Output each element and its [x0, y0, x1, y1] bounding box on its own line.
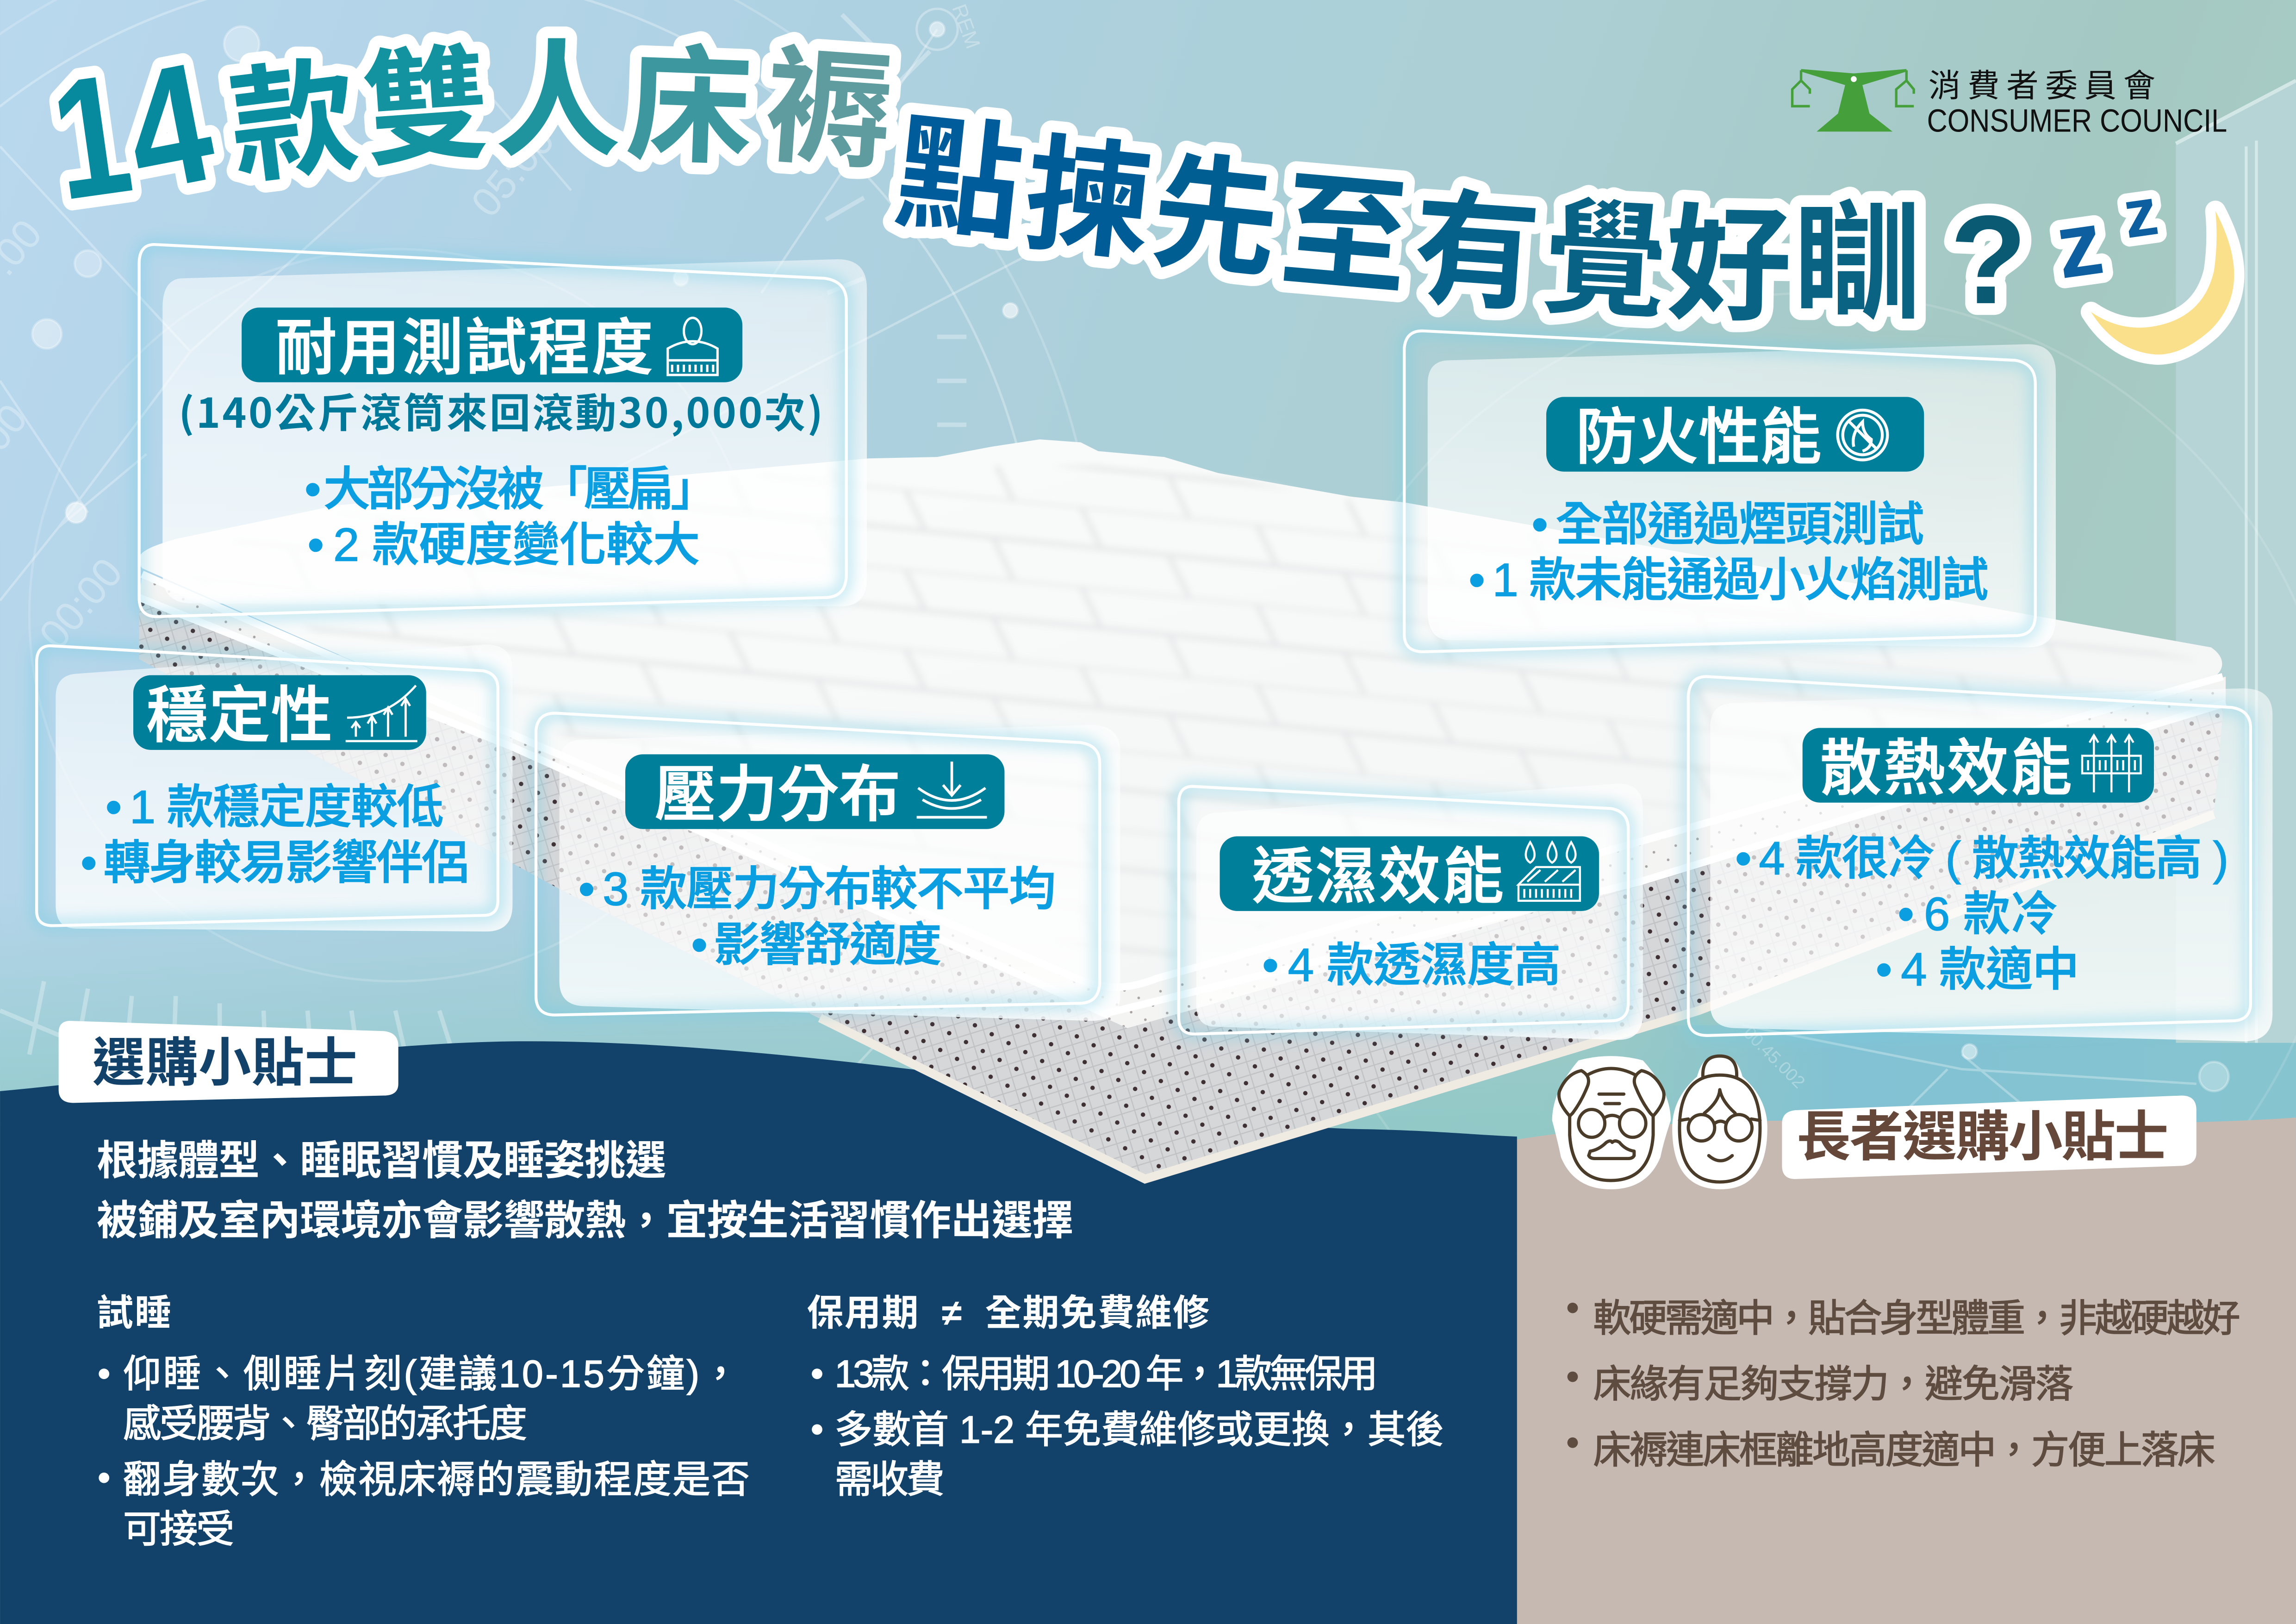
tip column: warranty: 保用期 ≠ 全期免費維修: [807, 1292, 1209, 1333]
buying tips tab: 選購小貼士: [92, 1020, 357, 1096]
mattress: quilted top surface: [139, 439, 2222, 987]
findings: • 4 款適中: [1876, 943, 2079, 996]
bullet: free repair: 需收費: [834, 1459, 945, 1501]
title line 2: 有: [1408, 178, 1544, 327]
buying tips intro: 被鋪及室內環境亦會影響散熱，宜按生活習慣作出選擇: [97, 1198, 1073, 1243]
findings: [305, 463, 717, 571]
findings: • 1 款未能通過小火焰測試: [1468, 554, 1989, 606]
bullet: try positions: [99, 1353, 740, 1445]
title line 1: 褥: [761, 36, 896, 185]
background: door frame: [2176, 81, 2296, 1043]
background: clock time labels: 00:00: [30, 550, 131, 657]
mattress: edge piping: [142, 574, 2223, 987]
panel: stability: [37, 644, 512, 931]
heading text: 散熱效能: [1820, 718, 2072, 807]
icon: sleeping z letters: z: [2118, 173, 2162, 252]
elderly tips tab: 長者選購小貼士: [1797, 1093, 2169, 1171]
bullet: turn over: [99, 1459, 750, 1550]
findings: • 1 款穩定度較低: [106, 781, 444, 833]
icon: rising arrows: [346, 686, 417, 741]
bullet: free repair: 多數首 1-2 年免費維修或更換，其後: [834, 1409, 1444, 1451]
heading pill: [1546, 397, 1924, 472]
heading pill: [242, 307, 742, 382]
findings: [579, 863, 1056, 971]
heading text: 防火性能: [1575, 387, 1822, 476]
panel outline: [139, 244, 846, 617]
logo text: [1927, 60, 2227, 139]
mattress: quilting pattern: [154, 466, 2196, 969]
tip column: trial sleep: 試睡: [97, 1292, 171, 1333]
bullet: try positions: 感受腰背、臀部的承托度: [123, 1403, 527, 1445]
title line 1: 4: [112, 26, 227, 228]
panel outline: [1404, 331, 2035, 652]
findings: • 全部通過煙頭測試: [1531, 498, 1924, 550]
panel outline: [1688, 676, 2251, 1036]
bullet: height: 床褥連床框離地高度適中，方便上落床: [1593, 1430, 2215, 1472]
bullet: free repair: [812, 1409, 1444, 1501]
bullet: turn over: 可接受: [123, 1508, 234, 1550]
title line 1: 人: [495, 31, 621, 172]
title line 1: [42, 26, 896, 236]
mattress: base piping: [820, 814, 2214, 1179]
title line 2: 先: [1145, 141, 1286, 294]
tip column: warranty: [807, 1292, 1444, 1501]
tip column: trial sleep: [97, 1292, 750, 1550]
panel outline: [37, 646, 498, 926]
heading text: 透濕效能: [1252, 827, 1504, 916]
panel outline: [1179, 787, 1628, 1034]
title line 2: 好: [1664, 194, 1793, 337]
panel glass: [1196, 784, 1643, 1040]
heading pill: [1803, 728, 2154, 803]
icon: sleeping z letters: z: [2050, 191, 2109, 298]
panel glass: [162, 259, 867, 606]
title line 2: [890, 103, 2027, 337]
heading pill: [1220, 837, 1599, 911]
background: floor: [0, 893, 2296, 1624]
consumer council logo: [1792, 60, 2227, 139]
title line 1: 款: [222, 45, 365, 200]
panel glass: [560, 725, 1120, 1021]
bullet: warranty years: 13款：保用期 10-20 年，1款無保用: [834, 1353, 1378, 1395]
background: clock time labels: REM: [947, 1, 984, 52]
logo text: 消費者委員會: [1929, 60, 2155, 106]
bullet: firmness: 軟硬需適中，貼合身型體重，非越硬越好: [1593, 1298, 2240, 1340]
elderly tips list: [1568, 1298, 2240, 1472]
title line 2: ?: [1950, 189, 2027, 330]
icon: mattress with head: [668, 318, 717, 375]
icon: elderly man: [1552, 1056, 1671, 1189]
panel: durability: [139, 244, 867, 617]
logo emblem: [1792, 70, 1914, 131]
icon: sleeping z letters: [2050, 173, 2162, 298]
findings: [1735, 832, 2228, 996]
icon: elderly woman: [1672, 1055, 1767, 1189]
title line 1: 床: [624, 35, 755, 180]
heading text: 穩定性: [146, 666, 332, 755]
findings: • 4 款透濕度高: [1262, 939, 1561, 992]
title line 2: 瞓: [1794, 194, 1920, 334]
bullet: turn over: 翻身數次，檢視床褥的震動程度是否: [123, 1459, 750, 1501]
panel: moisture: [1179, 784, 1643, 1040]
buying tips intro: [97, 1137, 1073, 1243]
findings: [1468, 498, 1989, 606]
findings: • 4 款很冷 ( 散熱效能高 ): [1735, 832, 2228, 885]
panel glass: [1428, 344, 2056, 647]
findings: • 影響舒適度: [691, 918, 941, 971]
icon: heat rising: [2082, 735, 2141, 793]
mattress: upper perforated band: [139, 574, 2226, 1028]
mattress: lower perforated side: [139, 586, 2226, 1181]
findings: • 2 款硬度變化較大: [307, 519, 700, 571]
icon: no flame: [1838, 410, 1887, 460]
icon: crescent moon: [2091, 211, 2234, 355]
buying tips intro: 根據體型、睡眠習慣及睡姿挑選: [97, 1137, 666, 1183]
title line 2: 覺: [1539, 187, 1672, 335]
brown tips background: [1517, 1118, 2296, 1624]
bullet: try positions: 仰睡、側睡片刻(建議10-15分鐘)，: [123, 1353, 740, 1395]
panel: fire: [1404, 331, 2056, 652]
logo text: CONSUMER COUNCIL: [1927, 103, 2227, 139]
panel glass: [56, 644, 512, 931]
background: clock time labels: 00.45.002: [1740, 1023, 1809, 1092]
heading text: 壓力分布: [654, 745, 901, 834]
panel glass: [1710, 688, 2272, 1041]
mattress photo: [139, 439, 2226, 1181]
findings: • 轉身較易影響伴侶: [81, 837, 469, 889]
heading pill: [625, 754, 1004, 829]
background: clock time labels: 05:00: [462, 117, 563, 225]
title line 1: 1: [42, 37, 141, 236]
background: floor reflection right: [1611, 1025, 2296, 1172]
subtitle: (140公斤滾筒來回滾動30,000次): [179, 380, 823, 440]
heading pill: [133, 675, 426, 750]
title line 1: 雙: [358, 33, 494, 182]
mattress: zip piping: [139, 598, 2226, 1013]
bullet: edge support: 床緣有足夠支撐力，避免滑落: [1593, 1363, 2073, 1405]
title line 2: 至: [1276, 159, 1414, 311]
panel: heat: [1688, 676, 2272, 1041]
title line 2: 揀: [1018, 123, 1158, 276]
title line 2: 點: [890, 103, 1029, 256]
icon: downward pressure: [917, 762, 987, 817]
heading text: 耐用測試程度: [275, 298, 653, 387]
findings: [81, 781, 469, 889]
background: clock time labels: [0, 1, 1809, 1092]
panel: pressure: [536, 713, 1120, 1021]
findings: • 大部分沒被「壓扁」: [305, 463, 717, 516]
navy tips background: [0, 1041, 1517, 1624]
icon: moisture drops: [1518, 842, 1580, 901]
findings: • 3 款壓力分布較不平均: [579, 863, 1056, 915]
findings: • 6 款冷: [1898, 888, 2057, 940]
panel outline: [536, 713, 1100, 1015]
